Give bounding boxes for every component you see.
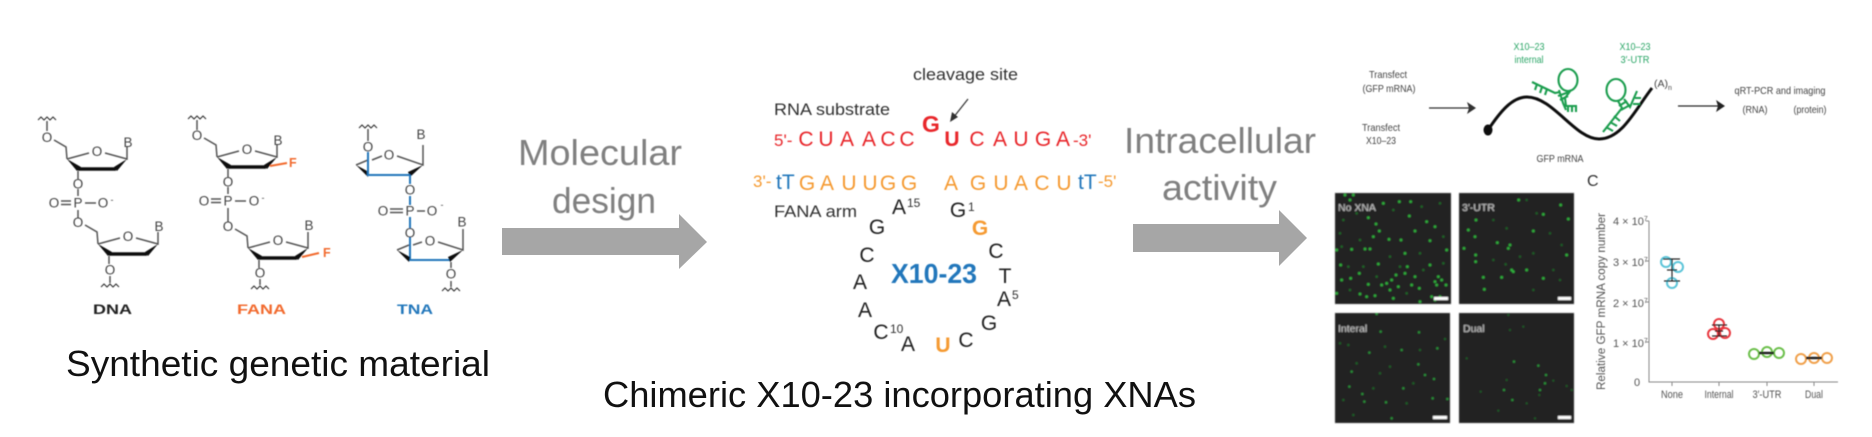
x axis labels (1661, 389, 1823, 401)
structure: FANA: O (255, 266, 265, 280)
catalytic loop letters: 5 (1012, 288, 1019, 302)
label: X10-23 internal (1514, 41, 1545, 66)
label: poly-A tail: (A) (1654, 78, 1668, 90)
micrograph: No XNA: No XNA (1338, 202, 1376, 214)
label: intracellular activity (1124, 120, 1316, 208)
FANA arm sequence: G (970, 172, 986, 195)
structure: TNA: O (384, 148, 394, 162)
y axis tick labels: 1 × 10 (1613, 338, 1644, 350)
structure: DNA: - (110, 195, 114, 205)
catalytic loop letters: G (950, 199, 966, 222)
FANA arm sequence: tT (1078, 171, 1097, 194)
label: GFP mRNA: GFP mRNA (1536, 153, 1584, 165)
catalytic loop letters: C (988, 240, 1004, 263)
y axis tick labels: 7 (1644, 338, 1648, 345)
RNA substrate sequence: U (818, 128, 834, 151)
x axis labels: None (1661, 389, 1683, 401)
RNA substrate sequence (774, 111, 1091, 151)
FANA arm sequence: G (901, 172, 917, 195)
RNA substrate sequence: A (993, 128, 1007, 151)
data: None (1661, 257, 1683, 288)
structure: DNA: O (42, 130, 52, 145)
FANA arm sequence: G (880, 172, 896, 195)
RNA substrate sequence: U (944, 128, 960, 151)
structure: TNA: TNA (397, 301, 433, 317)
RNA substrate sequence: A (1056, 128, 1070, 151)
panel: fluorescence micrographs (1335, 193, 1574, 423)
label: X10-23 3'-UTR (1620, 41, 1651, 66)
hairpin: 3'-UTR (1603, 79, 1641, 132)
structure: FANA: O (242, 142, 252, 157)
structure: FANA: F (289, 156, 297, 170)
y axis tick labels: 0 (1634, 377, 1640, 389)
structure: TNA: - (440, 200, 444, 210)
micrograph: 3'-UTR: 3′-UTR (1462, 202, 1495, 214)
structure: DNA: P (73, 196, 83, 210)
catalytic loop letters: 15 (907, 196, 921, 210)
RNA substrate sequence: -3' (1073, 131, 1091, 150)
catalytic loop letters: C (859, 244, 875, 267)
micrograph: Interal: Interal (1338, 323, 1367, 335)
structure: FANA (188, 116, 331, 317)
y axis tick labels: 7 (1644, 298, 1648, 305)
label: X10-23 internal: X10–23 (1514, 41, 1545, 53)
structure: DNA: B (123, 135, 133, 150)
structure: TNA: O (378, 204, 388, 218)
catalytic loop letters: 1 (968, 200, 975, 214)
y axis tick labels: 7 (1644, 216, 1648, 223)
catalytic loop letters: A (892, 196, 906, 219)
structure: FANA: O (223, 174, 233, 190)
catalytic loop letters: A (901, 333, 915, 356)
label: intracellular activity: activity (1162, 167, 1277, 208)
catalytic loop letters: A (853, 271, 867, 294)
arrow: cleavage site pointer (950, 99, 968, 122)
RNA substrate sequence: A (840, 128, 854, 151)
panel label C: C (1587, 173, 1599, 190)
structure: DNA (38, 117, 164, 317)
structure: TNA: O (425, 234, 435, 248)
structure: DNA: O (105, 262, 115, 278)
structure: FANA: B (304, 218, 314, 233)
FANA arm sequence: A (944, 172, 958, 195)
structure: TNA: B (457, 214, 467, 230)
catalytic loop letters: C (873, 321, 889, 344)
RNA substrate sequence: G (1035, 128, 1051, 151)
structure: FANA: FANA (237, 301, 286, 317)
FANA arm sequence: U (1056, 172, 1072, 195)
structure: FANA: O (249, 194, 259, 208)
label: RNA substrate: RNA substrate (774, 100, 890, 119)
heading: chimeric X10-23 incorporating XNAs: Chimeric X10-23 incorporating XNAs (603, 374, 1196, 415)
structure: TNA (356, 125, 467, 317)
structure: FANA: O (273, 233, 283, 248)
label: transfect X10-23: Transfect (1362, 122, 1400, 134)
data: Internal (1708, 319, 1730, 339)
micrograph: Dual: Dual (1463, 323, 1485, 335)
structure: DNA: B (154, 219, 164, 234)
label: transfect GFP mRNA (1362, 69, 1416, 95)
arrow: intracellular activity (1133, 210, 1307, 266)
label: transfect GFP mRNA: (GFP mRNA) (1362, 83, 1416, 95)
structure: FANA: O (199, 194, 209, 208)
structure: TNA: O (427, 204, 437, 218)
structure: FANA: - (262, 193, 264, 203)
RNA substrate sequence: U (1013, 128, 1029, 151)
RNA substrate sequence: C (969, 128, 985, 151)
label: cleavage site: cleavage site (913, 65, 1018, 84)
label: readout (1734, 85, 1826, 116)
label: intracellular activity: Intracellular (1124, 120, 1316, 161)
FANA arm sequence: U (993, 172, 1009, 195)
y axis tick labels: 2 × 10 (1613, 298, 1644, 310)
micrograph: 3'-UTR (1459, 193, 1574, 304)
y axis tick labels: 7 (1644, 257, 1648, 264)
label: transfect X10-23 (1362, 122, 1400, 147)
catalytic loop letters: C (958, 329, 974, 352)
structure: DNA: O (73, 176, 83, 192)
structure: TNA: B (416, 127, 426, 142)
label: transfect X10-23: X10–23 (1366, 135, 1396, 147)
label: X10-23 3'-UTR: 3′-UTR (1620, 54, 1650, 66)
arrow: transfection to mRNA (1429, 102, 1476, 114)
panel: X10-23 design (753, 65, 1116, 357)
structure: TNA: O (446, 266, 456, 282)
label: FANA arm: FANA arm (774, 202, 857, 221)
catalytic loop letters: A (997, 288, 1011, 311)
label: molecular design: design (552, 180, 656, 221)
catalytic loop letters: 10 (890, 322, 904, 336)
structure: FANA: P (223, 194, 233, 208)
FANA arm sequence: U (841, 172, 857, 195)
RNA substrate sequence: 5'- (774, 131, 792, 150)
label: transfect GFP mRNA: Transfect (1369, 69, 1407, 81)
catalytic loop letters: G (869, 216, 885, 239)
structure: FANA: O (223, 219, 233, 234)
x axis labels: 3′-UTR (1752, 389, 1782, 401)
label: poly-A tail: n (1668, 85, 1672, 92)
catalytic loop letters: U (935, 334, 951, 357)
RNA substrate sequence: C (880, 128, 896, 151)
FANA arm sequence (753, 171, 1116, 195)
structure: TNA: O (405, 226, 415, 240)
arrow: mRNA to readout (1678, 100, 1725, 112)
data: 3'-UTR (1749, 347, 1784, 359)
micrograph: No XNA (1335, 193, 1451, 304)
structure: DNA: DNA (93, 301, 132, 317)
y axis tick labels: 3 × 10 (1613, 257, 1644, 269)
panel: transfection schematic (1362, 41, 1826, 165)
label: molecular design (518, 132, 682, 221)
structure: FANA: F (323, 246, 331, 260)
label: X10-23 3'-UTR: X10–23 (1620, 41, 1651, 53)
label: X10-23: X10-23 (891, 258, 977, 289)
y axis tick labels (1613, 216, 1648, 389)
catalytic loop letters: A (858, 299, 872, 322)
heading: synthetic genetic material: Synthetic genetic material (66, 343, 490, 384)
structure: TNA: P (405, 204, 415, 218)
structure: DNA: O (73, 215, 83, 230)
catalytic loop letters: G (981, 312, 997, 335)
RNA substrate sequence: C (899, 128, 915, 151)
label: X10-23 internal: internal (1514, 54, 1544, 66)
label: readout: (RNA) (1742, 104, 1768, 116)
axes (1646, 221, 1838, 386)
RNA substrate sequence: G (922, 111, 940, 137)
structure: DNA: O (92, 144, 102, 159)
FANA arm sequence: tT (776, 171, 795, 194)
structure: FANA: B (273, 133, 283, 148)
micrograph: Dual (1459, 313, 1574, 423)
FANA arm sequence: 3'- (753, 172, 771, 191)
data: Dual (1796, 353, 1832, 364)
structure: TNA: O (405, 182, 415, 198)
label: readout: qRT-PCR and imaging (1734, 85, 1826, 97)
catalytic loop letters (853, 196, 1019, 357)
FANA arm sequence: A (820, 172, 834, 195)
structure: TNA: O (363, 140, 373, 154)
chart: relative GFP mRNA copy number (1587, 173, 1838, 401)
hairpin: internal (1532, 69, 1578, 112)
label: molecular design: Molecular (518, 132, 682, 173)
RNA substrate sequence: C (798, 128, 814, 151)
panel: synthetic genetic material structures (38, 116, 467, 317)
y axis tick labels: 4 × 10 (1613, 216, 1644, 228)
FANA arm sequence: C (1034, 172, 1050, 195)
FANA arm sequence: U (862, 172, 878, 195)
RNA substrate sequence: A (862, 128, 876, 151)
micrograph: Interal (1335, 313, 1450, 423)
catalytic loop letters: G (972, 217, 988, 240)
structure: DNA: O (123, 229, 133, 244)
GFP mRNA strand (1484, 88, 1652, 139)
FANA arm sequence: A (1014, 172, 1028, 195)
structure: DNA: O (98, 196, 108, 210)
arrow: molecular design (502, 214, 707, 269)
x axis labels: Internal (1704, 389, 1734, 401)
structure: FANA: O (192, 128, 202, 143)
FANA arm sequence: G (799, 172, 815, 195)
x axis labels: Dual (1805, 389, 1823, 401)
label: readout: (protein) (1794, 104, 1826, 116)
y axis title: Relative GFP mRNA copy number (1596, 213, 1608, 390)
structure: DNA: O (49, 196, 59, 210)
catalytic loop letters: T (999, 265, 1012, 288)
FANA arm sequence: -5' (1098, 172, 1116, 191)
